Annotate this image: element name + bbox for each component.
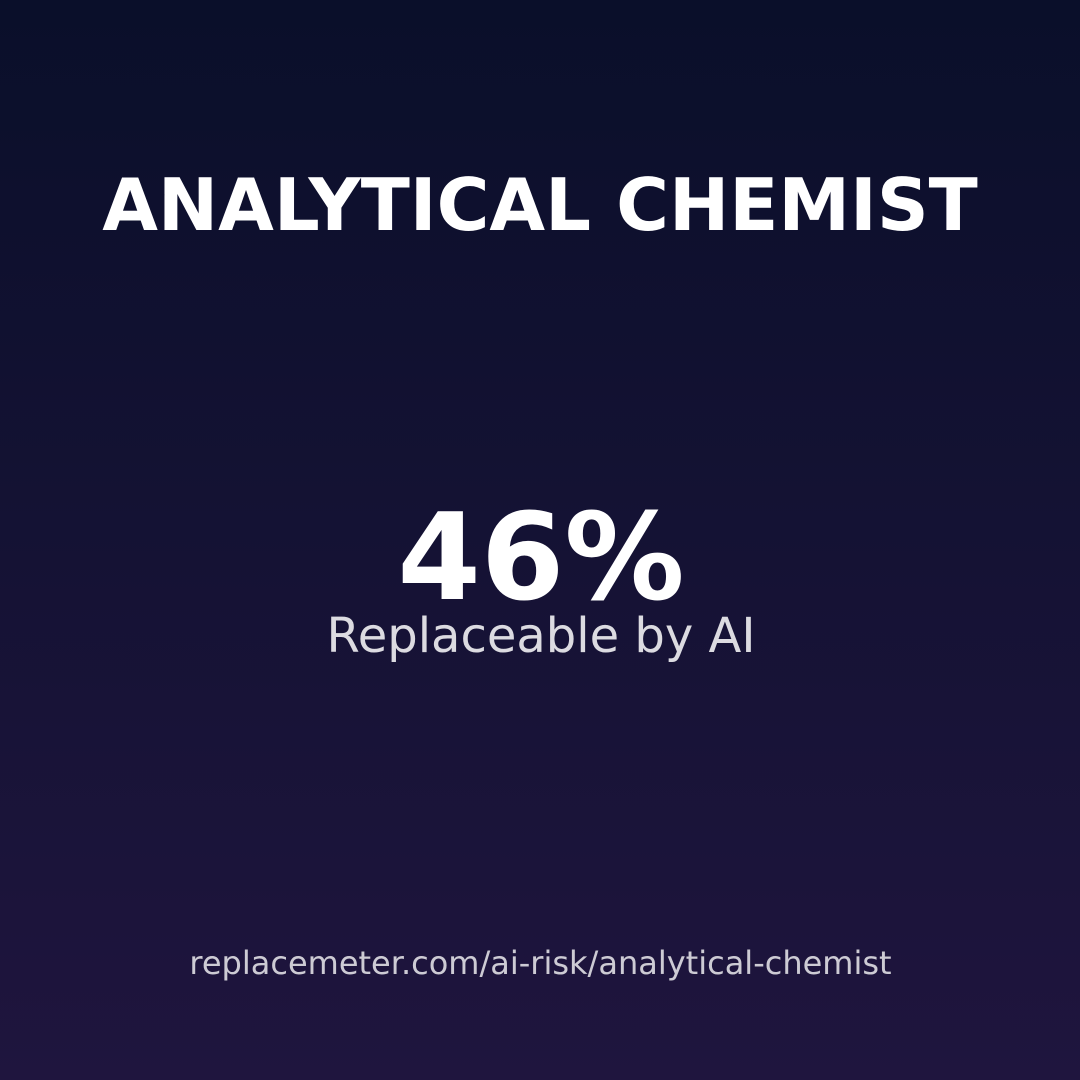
subtitle: Replaceable by AI	[326, 608, 756, 664]
source URL: replacemeter.com/ai-risk/analytical-chemist	[189, 944, 892, 982]
title: ANALYTICAL CHEMIST	[102, 163, 978, 247]
big percentage: 46%	[397, 489, 685, 628]
